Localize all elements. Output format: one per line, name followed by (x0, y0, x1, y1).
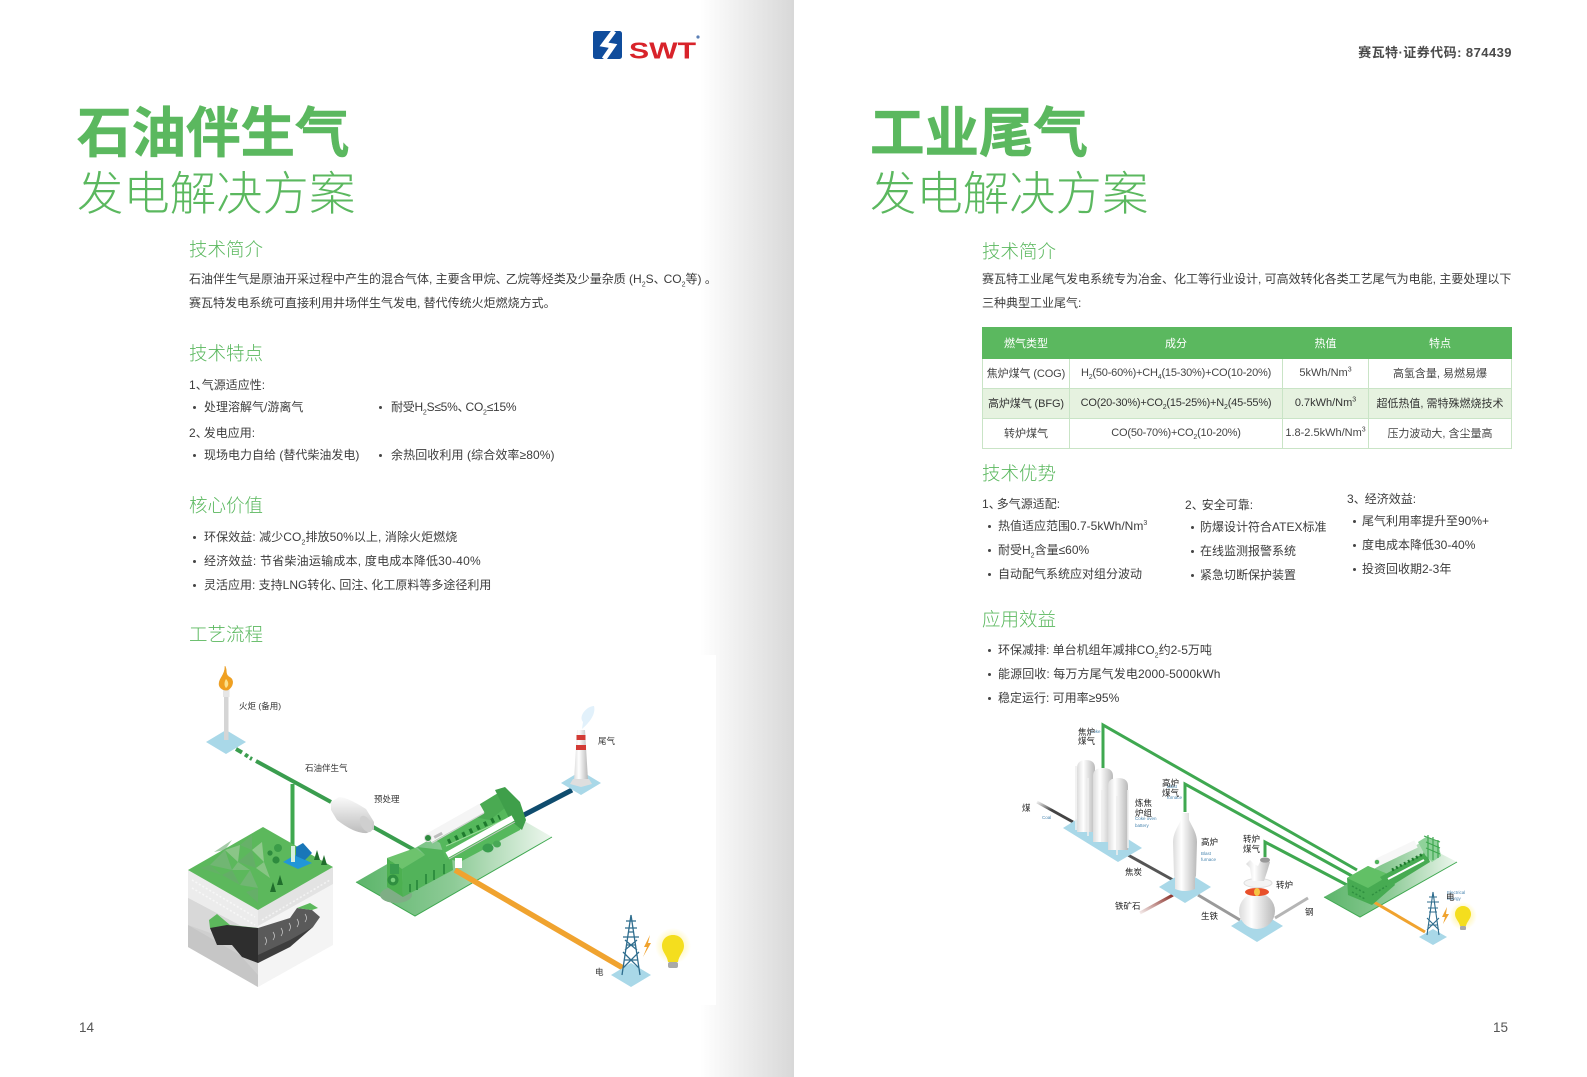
heading: 技术简介 left: 技术简介 (189, 236, 263, 262)
heading: 技术简介 right: 技术简介 (982, 238, 1056, 264)
logo: SWT (593, 31, 700, 64)
advantages column 2 (1185, 498, 1326, 582)
tech features list: 余热回收利用 (综合效率≥80%) (391, 448, 555, 462)
page number 15: 15 (1493, 1020, 1508, 1035)
blue english labels: Coke oven (1135, 816, 1157, 821)
gas engine (387, 787, 526, 897)
advantages column 2: 在线监测报警系统 (1200, 544, 1296, 558)
exhaust pipe (522, 790, 572, 816)
advantages column 3: 度电成本降低30-40% (1362, 538, 1475, 552)
diagram backing panel (170, 655, 716, 1005)
gas type table: CO(50-70%)+CO2(10-20%) (1111, 427, 1241, 441)
advantages column 3: 投资回收期2-3年 (1362, 562, 1451, 576)
blue english labels: energy (1447, 896, 1462, 901)
gas type table: 压力波动大, 含尘量高 (1387, 428, 1493, 440)
heading: 工艺流程: 工艺流程 (189, 621, 263, 647)
converter (1239, 857, 1275, 929)
chinese labels: 煤 (1022, 803, 1031, 813)
gas type table (982, 327, 1512, 449)
heading: 技术优势: 技术优势 (982, 460, 1056, 486)
gas type table: 高氢含量, 易燃易爆 (1393, 368, 1487, 380)
gas type table: H2(50-60%)+CH4(15-30%)+CO(10-20%) (1081, 367, 1271, 381)
process diagram: associated gas (188, 666, 690, 987)
left title line 1: 石油伴生气 (77, 89, 350, 168)
intro text right (982, 272, 1511, 310)
pretreatment tank (331, 797, 375, 834)
coke oven silos (1076, 760, 1128, 855)
blue english labels: Blast (1167, 784, 1178, 789)
blast furnace (1173, 813, 1197, 891)
labels (239, 701, 616, 977)
intro text left: 赛瓦特发电系统可直接利用井场伴生气发电, 替代传统火炬燃烧方式。 (189, 296, 556, 310)
logo: SWT: SWT (629, 38, 696, 64)
gas type table: 热值 (1314, 338, 1336, 350)
tech features list: 现场电力自给 (替代柴油发电) (204, 448, 359, 462)
chinese labels: 转炉 (1243, 834, 1260, 844)
gas type table: 0.7kWh/Nm3 (1295, 396, 1356, 409)
chinese labels: 煤气 (1243, 844, 1261, 854)
core value list: 经济效益: 节省柴油运输成本, 度电成本降低30-40% (204, 554, 481, 568)
gas engine (1347, 835, 1441, 905)
chinese labels: 高炉 (1162, 778, 1179, 788)
core value list (193, 530, 491, 592)
page number 14: 14 (79, 1020, 94, 1035)
page gutter shadow (700, 0, 794, 1077)
advantages column 2: 防爆设计符合ATEX标准 (1200, 520, 1326, 534)
chinese labels: 炉组 (1135, 808, 1153, 818)
chimney (561, 706, 601, 795)
gas type table: 燃气类型 (1004, 338, 1048, 350)
blue english labels: Coke (1090, 729, 1101, 734)
gas type table: 5kWh/Nm3 (1299, 366, 1352, 379)
labels: 尾气 (598, 736, 616, 746)
benefits list: 能源回收: 每万方尾气发电2000-5000kWh (998, 666, 1221, 680)
core value list: 环保效益: 减少CO2排放50%以上, 消除火炬燃烧 (204, 530, 457, 546)
chinese labels: 炼焦 (1135, 798, 1153, 808)
right title line 2: 发电解决方案 (870, 157, 1148, 224)
lightning (643, 935, 651, 957)
intro text right: 三种典型工业尾气: (982, 296, 1081, 310)
blue english labels: furnace (1167, 795, 1183, 800)
chinese labels: 焦炭 (1125, 867, 1143, 877)
converter plate (1231, 910, 1283, 942)
heading: 应用效益: 应用效益 (982, 606, 1056, 632)
labels: 石油伴生气 (305, 763, 348, 773)
engine slab (356, 803, 552, 916)
chinese labels: 转炉 (1276, 880, 1293, 890)
right title line 1: 工业尾气 (870, 89, 1088, 168)
benefits list: 环保减排: 单台机组年减排CO2约2-5万吨 (998, 642, 1212, 659)
gas pipes (236, 749, 418, 860)
tech features list (189, 378, 555, 462)
intro text left (189, 272, 717, 310)
chinese labels: 煤气 (1078, 736, 1096, 746)
gas type table: CO(20-30%)+CO2(15-25%)+N2(45-55%) (1081, 397, 1271, 411)
blast furnace plate (1159, 871, 1211, 903)
advantages column 2: 2、安全可靠: (1185, 498, 1253, 512)
blue english labels: Coal (1042, 815, 1051, 820)
advantages column 1: 耐受H2含量≤60% (998, 542, 1089, 559)
chinese labels: 生铁 (1201, 911, 1219, 921)
intro text right: 赛瓦特工业尾气发电系统专为冶金、化工等行业设计, 可高效转化各类工艺尾气为电能, 主要处理以下 (982, 272, 1511, 286)
blue english labels: furnace (1201, 857, 1217, 862)
chinese labels: 铁矿石 (1115, 901, 1141, 911)
gas type table: 特点 (1429, 338, 1451, 350)
power line (455, 870, 623, 968)
chinese labels: 焦炉 (1078, 727, 1095, 737)
engine slab (1324, 843, 1457, 917)
blue english labels (1042, 729, 1465, 901)
chinese labels: 电 (1446, 892, 1455, 902)
labels: 预处理 (374, 794, 400, 804)
advantages column 1 (982, 496, 1147, 580)
lightning (1442, 907, 1449, 924)
core value list: 灵活应用: 支持LNG转化、回注、化工原料等多途径利用 (204, 578, 491, 592)
chinese labels: 钢 (1305, 907, 1314, 917)
advantages column 1: 热值适应范围0.7-5kWh/Nm3 (998, 518, 1147, 532)
right header: stock code: 赛瓦特·证券代码: 874439 (1358, 45, 1512, 60)
heading: 技术特点: 技术特点 (189, 340, 263, 366)
heading: 核心价值: 核心价值 (189, 492, 263, 518)
advantages column 1: 自动配气系统应对组分波动 (998, 566, 1142, 580)
advantages column 3: 尾气利用率提升至90%+ (1362, 514, 1489, 528)
blue english labels: Electrical (1447, 890, 1465, 895)
tech features list: 2、发电应用: (189, 426, 255, 440)
gas type table: 成分 (1165, 338, 1187, 350)
advantages column 3: 3、经济效益: (1347, 492, 1416, 506)
tech features list: 1、气源适应性: (189, 378, 265, 392)
light bulb (655, 928, 691, 968)
light bulb (1449, 902, 1477, 930)
chinese labels: 高炉 (1201, 837, 1218, 847)
power line (1367, 898, 1425, 932)
transmission tower (1419, 892, 1447, 945)
gas type table: 焦炉煤气 (COG) (987, 368, 1065, 380)
gas pipes (1103, 725, 1357, 885)
process diagram: industrial tail gas (1022, 722, 1476, 945)
left title line 2: 发电解决方案 (77, 157, 355, 224)
chinese labels: 煤气 (1162, 788, 1180, 798)
tech features list: 耐受H2S≤5%、CO2≤15% (391, 400, 516, 416)
tech features list: 处理溶解气/游离气 (204, 400, 303, 414)
gas type table: 超低热值, 需特殊燃烧技术 (1376, 398, 1504, 410)
oil reservoir block (188, 827, 333, 987)
flare stack (206, 666, 246, 754)
coke oven plate (1063, 813, 1142, 862)
feed lines (1037, 802, 1308, 920)
benefits list: 稳定运行: 可用率≥95% (998, 690, 1119, 704)
chinese labels (1022, 727, 1455, 921)
gas type table: 转炉煤气 (1004, 428, 1048, 440)
labels: 火炬 (备用) (239, 701, 281, 711)
benefits list (988, 642, 1221, 704)
gas type table: 1.8-2.5kWh/Nm3 (1285, 426, 1366, 439)
gas type table: 高炉煤气 (BFG) (988, 398, 1064, 410)
intro text left: 石油伴生气是原油开采过程中产生的混合气体, 主要含甲烷、乙烷等烃类及少量杂质 (H2S、CO2等) 。 (189, 272, 717, 288)
blue english labels: battery (1135, 823, 1150, 828)
labels: 电 (595, 967, 604, 977)
advantages column 1: 1、多气源适配: (982, 496, 1060, 510)
transmission tower (611, 915, 651, 987)
blue english labels: Blast (1201, 851, 1212, 856)
advantages column 3 (1347, 492, 1489, 576)
advantages column 2: 紧急切断保护装置 (1200, 568, 1296, 582)
